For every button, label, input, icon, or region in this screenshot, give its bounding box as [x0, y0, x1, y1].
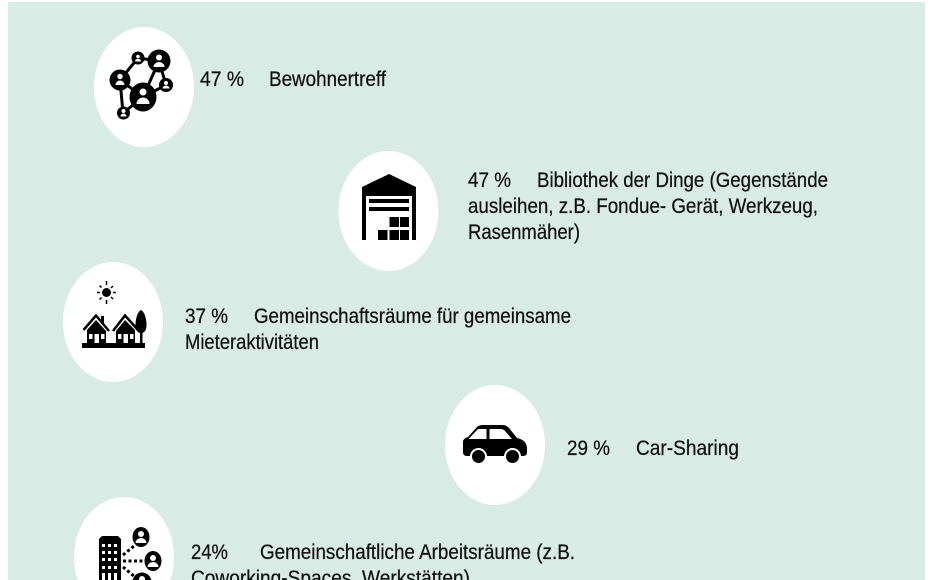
- text: 47 % Bibliothek der Dinge: Bibliothek der Dinge (Gegenstände: [537, 169, 828, 192]
- item: Car-Sharing: [445, 385, 739, 505]
- text: 47 % Bibliothek der Dinge: ausleihen, z.B. Fondue- Gerät, Werkzeug,: [468, 195, 818, 218]
- item: Gemeinschaftliche Arbeitsräume: [74, 497, 575, 580]
- text: 37 % Gemeinschaftsräume: Mieteraktivitäten: [185, 331, 319, 354]
- text: 24% Gemeinschaftliche Arbeitsräume: [191, 541, 575, 580]
- text: 24% Gemeinschaftliche Arbeitsräume: Gemeinschaftliche Arbeitsräume (z.B.: [260, 541, 575, 564]
- icon: warehouse: [338, 151, 438, 271]
- text: 29 % Car-Sharing: 29 %: [567, 437, 610, 460]
- text: 37 % Gemeinschaftsräume: 37 %: [185, 305, 228, 328]
- text: 47 % Bewohnertreff: [200, 68, 386, 91]
- item: Bibliothek der Dinge: [338, 151, 828, 271]
- text: 47 % Bibliothek der Dinge: [468, 169, 828, 244]
- icon: car: [445, 385, 545, 505]
- text: 47 % Bewohnertreff: Bewohnertreff: [269, 68, 386, 91]
- text: 47 % Bibliothek der Dinge: 47 %: [468, 169, 511, 192]
- text: 29 % Car-Sharing: [567, 437, 739, 460]
- text: 37 % Gemeinschaftsräume: Gemeinschaftsräume für gemeinsame: [254, 305, 571, 328]
- text: 24% Gemeinschaftliche Arbeitsräume: 24%: [191, 541, 228, 564]
- text: 37 % Gemeinschaftsräume: [185, 305, 571, 354]
- text: 29 % Car-Sharing: Car-Sharing: [636, 437, 739, 460]
- item: Bewohnertreff: [94, 27, 386, 147]
- item: Gemeinschaftsräume: [63, 262, 571, 382]
- icon: building with people: [74, 497, 174, 580]
- icon: houses with sun and tree: [63, 262, 163, 382]
- icon: network of people: [94, 27, 194, 147]
- text: 47 % Bewohnertreff: 47 %: [200, 68, 244, 91]
- text: 47 % Bibliothek der Dinge: Rasenmäher): [468, 221, 580, 244]
